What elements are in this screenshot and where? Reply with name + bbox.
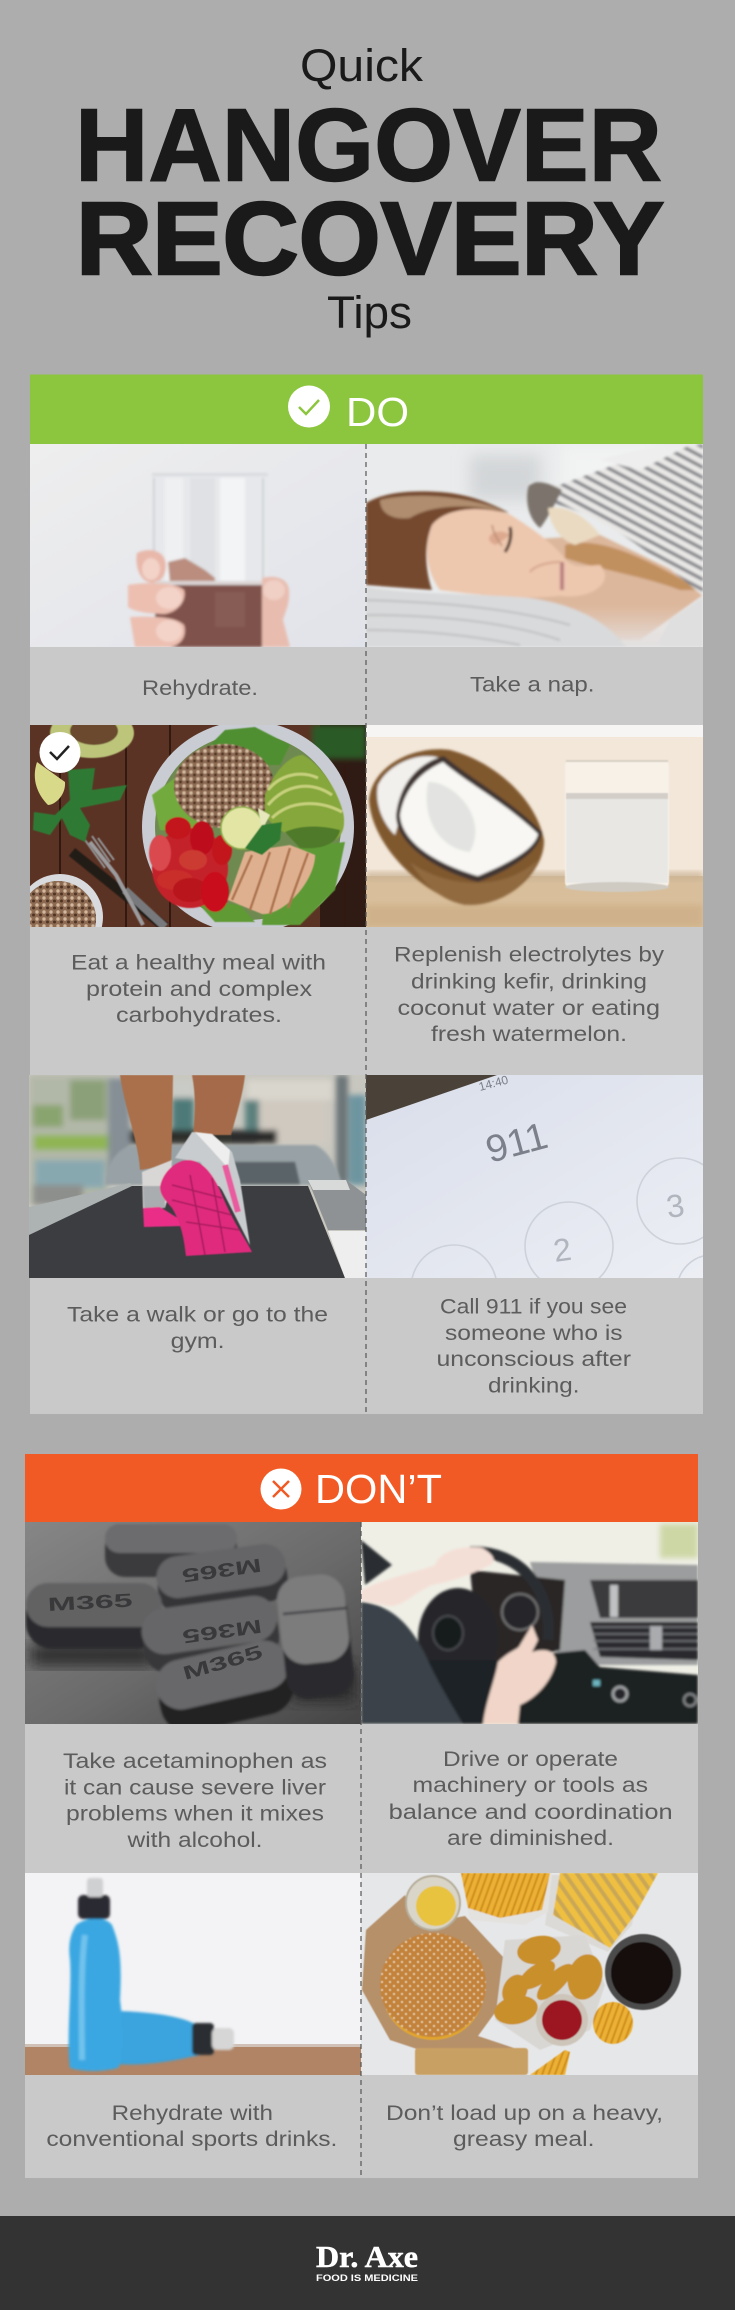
photo: acetaminophen pills [25, 1522, 361, 1738]
title: Tips [327, 287, 412, 338]
caption backgrounds don't [25, 1724, 698, 1873]
ketchup [536, 1994, 588, 2046]
bread [415, 2048, 528, 2075]
panel: don't [25, 1454, 698, 2178]
captions do: Take a walk or go to the [67, 1304, 328, 1326]
do header band [30, 374, 703, 444]
captions do: Replenish electrolytes by [394, 944, 665, 966]
captions do: protein and complex [86, 978, 313, 1001]
icon: check badge [40, 732, 80, 773]
photo: acetaminophen pills: M365 [47, 1591, 134, 1616]
chips tray [461, 1873, 552, 1925]
water [155, 584, 264, 647]
lime wedge [35, 762, 65, 805]
captions don't: balance and coordination [389, 1801, 673, 1824]
photo: phone dialing 911: 911 [481, 1115, 552, 1172]
nuggets [492, 1932, 607, 2028]
icon: check circle [288, 386, 330, 428]
captions don't: it can cause severe liver [64, 1777, 326, 1800]
pill F [275, 1572, 356, 1701]
steering wheel [470, 1552, 548, 1640]
captions don't: Don’t load up on a heavy, [386, 2102, 663, 2125]
pill D [139, 1593, 282, 1676]
pill B [154, 1541, 291, 1617]
caption backgrounds do [30, 647, 703, 725]
pill C [26, 1587, 162, 1649]
pill A [105, 1527, 237, 1577]
captions don't [46, 1748, 673, 2151]
photo: acetaminophen pills: M365 [180, 1615, 263, 1647]
upper arm and hand [361, 1547, 494, 1606]
captions don't: greasy meal. [453, 2128, 594, 2151]
pill E [151, 1635, 299, 1738]
treadmill console [105, 1145, 342, 1185]
captions do: Eat a healthy meal with [71, 951, 326, 974]
captions do: carbohydrates. [116, 1004, 282, 1027]
lower hand [483, 1625, 556, 1724]
logo: Dr. Axe [316, 2239, 418, 2274]
photo: acetaminophen pills: M365 [180, 1554, 263, 1586]
tomatoes [152, 828, 228, 908]
captions do: Call 911 if you see [440, 1296, 627, 1319]
photo: acetaminophen pills: M365 [181, 1642, 266, 1685]
pillow [587, 612, 676, 646]
hair [366, 491, 509, 590]
photo: phone dialing 911: 14:40 [477, 1073, 510, 1094]
divider don't [360, 1522, 362, 2178]
captions do [67, 674, 665, 1398]
footer [0, 2216, 735, 2310]
icon: cross circle [260, 1468, 302, 1510]
herb [245, 822, 282, 855]
captions do: drinking. [488, 1375, 580, 1398]
photo: coconut and water glass [366, 725, 703, 927]
chicken [228, 845, 315, 914]
back foot [142, 1132, 252, 1256]
photo: greasy fast food [361, 1873, 698, 2075]
captions don't: Drive or operate [443, 1748, 618, 1771]
belt [29, 1186, 345, 1278]
photo: healthy meal bowl [30, 725, 366, 927]
captions don't: conventional sports drinks. [46, 2128, 337, 2151]
right fingers [262, 577, 290, 647]
glass body [154, 558, 188, 616]
captions don't: Take acetaminophen as [63, 1750, 327, 1773]
captions don't: problems when it mixes [66, 1803, 324, 1826]
upper dash [530, 1562, 698, 1665]
chips right [593, 2002, 633, 2044]
avocado [265, 755, 344, 843]
plate [142, 721, 354, 933]
photo: glass of water in hand [30, 444, 366, 647]
captions don't: with alcohol. [126, 1829, 262, 1852]
captions do: someone who is [445, 1322, 623, 1345]
captions do: fresh watermelon. [431, 1023, 627, 1046]
captions do: drinking kefir, drinking [411, 971, 647, 994]
title: Quick [300, 40, 424, 91]
fingers behind glass [168, 558, 215, 583]
photo: sports drink bottles [25, 1873, 361, 2075]
do header band: DO [346, 389, 409, 435]
captions don't: are diminished. [447, 1827, 614, 1850]
photo: driving a car [361, 1522, 698, 1724]
seat [361, 1602, 463, 1724]
face [427, 509, 605, 597]
lettuce [210, 727, 290, 765]
title [75, 40, 664, 338]
nugget tray [495, 1935, 605, 2050]
title: RECOVERY [76, 181, 664, 296]
photo: phone dialing 911: 3 [664, 1187, 687, 1225]
legs [120, 1075, 173, 1170]
captions do: coconut water or eating [398, 997, 660, 1020]
thumb [136, 550, 166, 583]
captions do: unconscious after [436, 1348, 631, 1371]
fingers [128, 583, 185, 614]
photo: phone dialing 911: 2 [551, 1231, 574, 1269]
burger [382, 1940, 484, 2040]
cola [605, 1934, 681, 2010]
right rail [308, 1180, 366, 1230]
captions don't: Rehydrate with [112, 2102, 273, 2125]
panel: do [17, 374, 735, 1414]
photo: phone dialing 911 [366, 1073, 735, 1331]
divider do [365, 444, 367, 1414]
captions do: Take a nap. [470, 674, 594, 696]
glass [565, 760, 669, 892]
coconut shell [369, 749, 544, 905]
captions do: gym. [171, 1330, 225, 1353]
neck and hair lock [520, 535, 703, 640]
photo: woman taking a nap [366, 444, 703, 647]
don't header band [25, 1454, 698, 1522]
sauce cup [406, 1876, 460, 1930]
captions don't: machinery or tools as [412, 1774, 648, 1797]
logo: FOOD IS MEDICINE [316, 2273, 418, 2284]
side bowl [30, 874, 103, 927]
front shoe upper [175, 1132, 250, 1245]
fork and knife [72, 836, 165, 927]
blanket [530, 444, 703, 596]
photo: treadmill walk [29, 1075, 366, 1278]
fries tray [545, 1875, 640, 1952]
lower dash [470, 1650, 698, 1724]
lime [221, 807, 263, 849]
title: HANGOVER [75, 88, 662, 202]
don't header band: DON’T [315, 1466, 442, 1512]
front sole [160, 1160, 252, 1256]
parsley [33, 768, 127, 842]
quinoa [174, 744, 274, 828]
left rail [29, 1183, 132, 1235]
hub [418, 1588, 498, 1688]
vents [590, 1622, 698, 1660]
gauge area [470, 1570, 565, 1670]
paper [362, 1895, 520, 2060]
captions do: Rehydrate. [142, 677, 258, 700]
avocado half [49, 725, 135, 759]
